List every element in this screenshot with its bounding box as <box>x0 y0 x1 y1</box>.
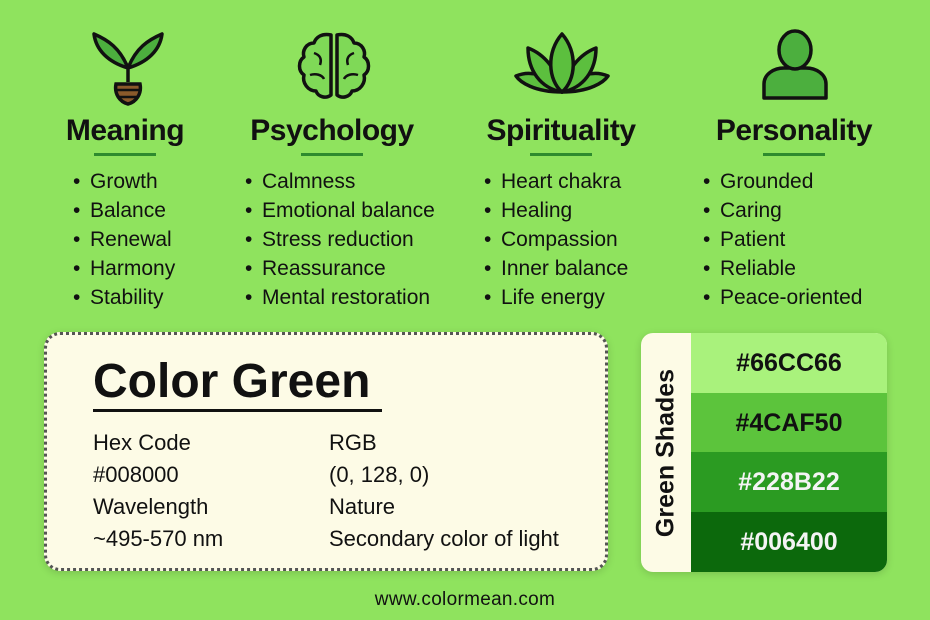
swatch 3 <box>691 452 887 512</box>
list: spirituality: Life energy <box>501 286 605 309</box>
list: personality: Caring <box>720 199 782 222</box>
swatch 2 <box>691 393 887 453</box>
info right column <box>329 430 559 551</box>
list: spirituality: Compassion <box>501 228 618 251</box>
icon: person <box>762 29 828 100</box>
list: psychology: Emotional balance <box>262 199 435 222</box>
icon: plant <box>92 32 164 106</box>
list: personality: Peace-oriented <box>720 286 862 309</box>
info left column: #008000 <box>93 462 179 487</box>
list: meaning: Harmony <box>90 257 175 280</box>
label: Green Shades: Green Shades <box>652 369 680 537</box>
list: personality <box>704 170 862 309</box>
panel: color info <box>44 332 608 571</box>
panel: green shades <box>641 333 887 572</box>
list: personality: Grounded <box>720 170 813 193</box>
list: personality: Reliable <box>720 257 796 280</box>
footer url: www.colormean.com <box>375 589 555 610</box>
list: meaning: Balance <box>90 199 166 222</box>
list: spirituality: Healing <box>501 199 572 222</box>
icon: lotus <box>514 32 610 94</box>
swatch 4: #006400 <box>740 528 838 556</box>
info right column: (0, 128, 0) <box>329 462 429 487</box>
list: psychology: Stress reduction <box>262 228 414 251</box>
list: meaning: Growth <box>90 170 158 193</box>
list: psychology: Reassurance <box>262 257 386 280</box>
swatch 1: #66CC66 <box>736 349 842 377</box>
list: psychology: Calmness <box>262 170 355 193</box>
list: meaning: Renewal <box>90 228 172 251</box>
info left column: Wavelength <box>93 494 208 519</box>
list: meaning <box>74 170 176 309</box>
swatch 2: #4CAF50 <box>736 409 842 437</box>
list: psychology: Mental restoration <box>262 286 430 309</box>
info right column: Nature <box>329 494 395 519</box>
swatch 3: #228B22 <box>738 468 840 496</box>
swatch 1 <box>691 333 887 393</box>
info right column: RGB <box>329 430 377 455</box>
list: spirituality <box>484 170 628 309</box>
swatch 4 <box>691 512 887 572</box>
list: meaning: Stability <box>90 286 164 309</box>
info left column: Hex Code <box>93 430 191 455</box>
heading: Personality: Personality <box>716 114 872 147</box>
list: spirituality: Heart chakra <box>501 170 621 193</box>
list: personality: Patient <box>720 228 785 251</box>
icon: brain <box>298 32 370 99</box>
list: spirituality: Inner balance <box>501 257 628 280</box>
info left column <box>93 430 223 551</box>
list: psychology <box>246 170 435 309</box>
info right column: Secondary color of light <box>329 526 559 551</box>
heading: Spirituality: Spirituality <box>486 114 636 147</box>
heading: Meaning: Meaning <box>66 114 184 147</box>
info left column: ~495-570 nm <box>93 526 223 551</box>
title: Color Green: Color Green <box>93 355 370 408</box>
heading: Psychology: Psychology <box>250 114 414 147</box>
